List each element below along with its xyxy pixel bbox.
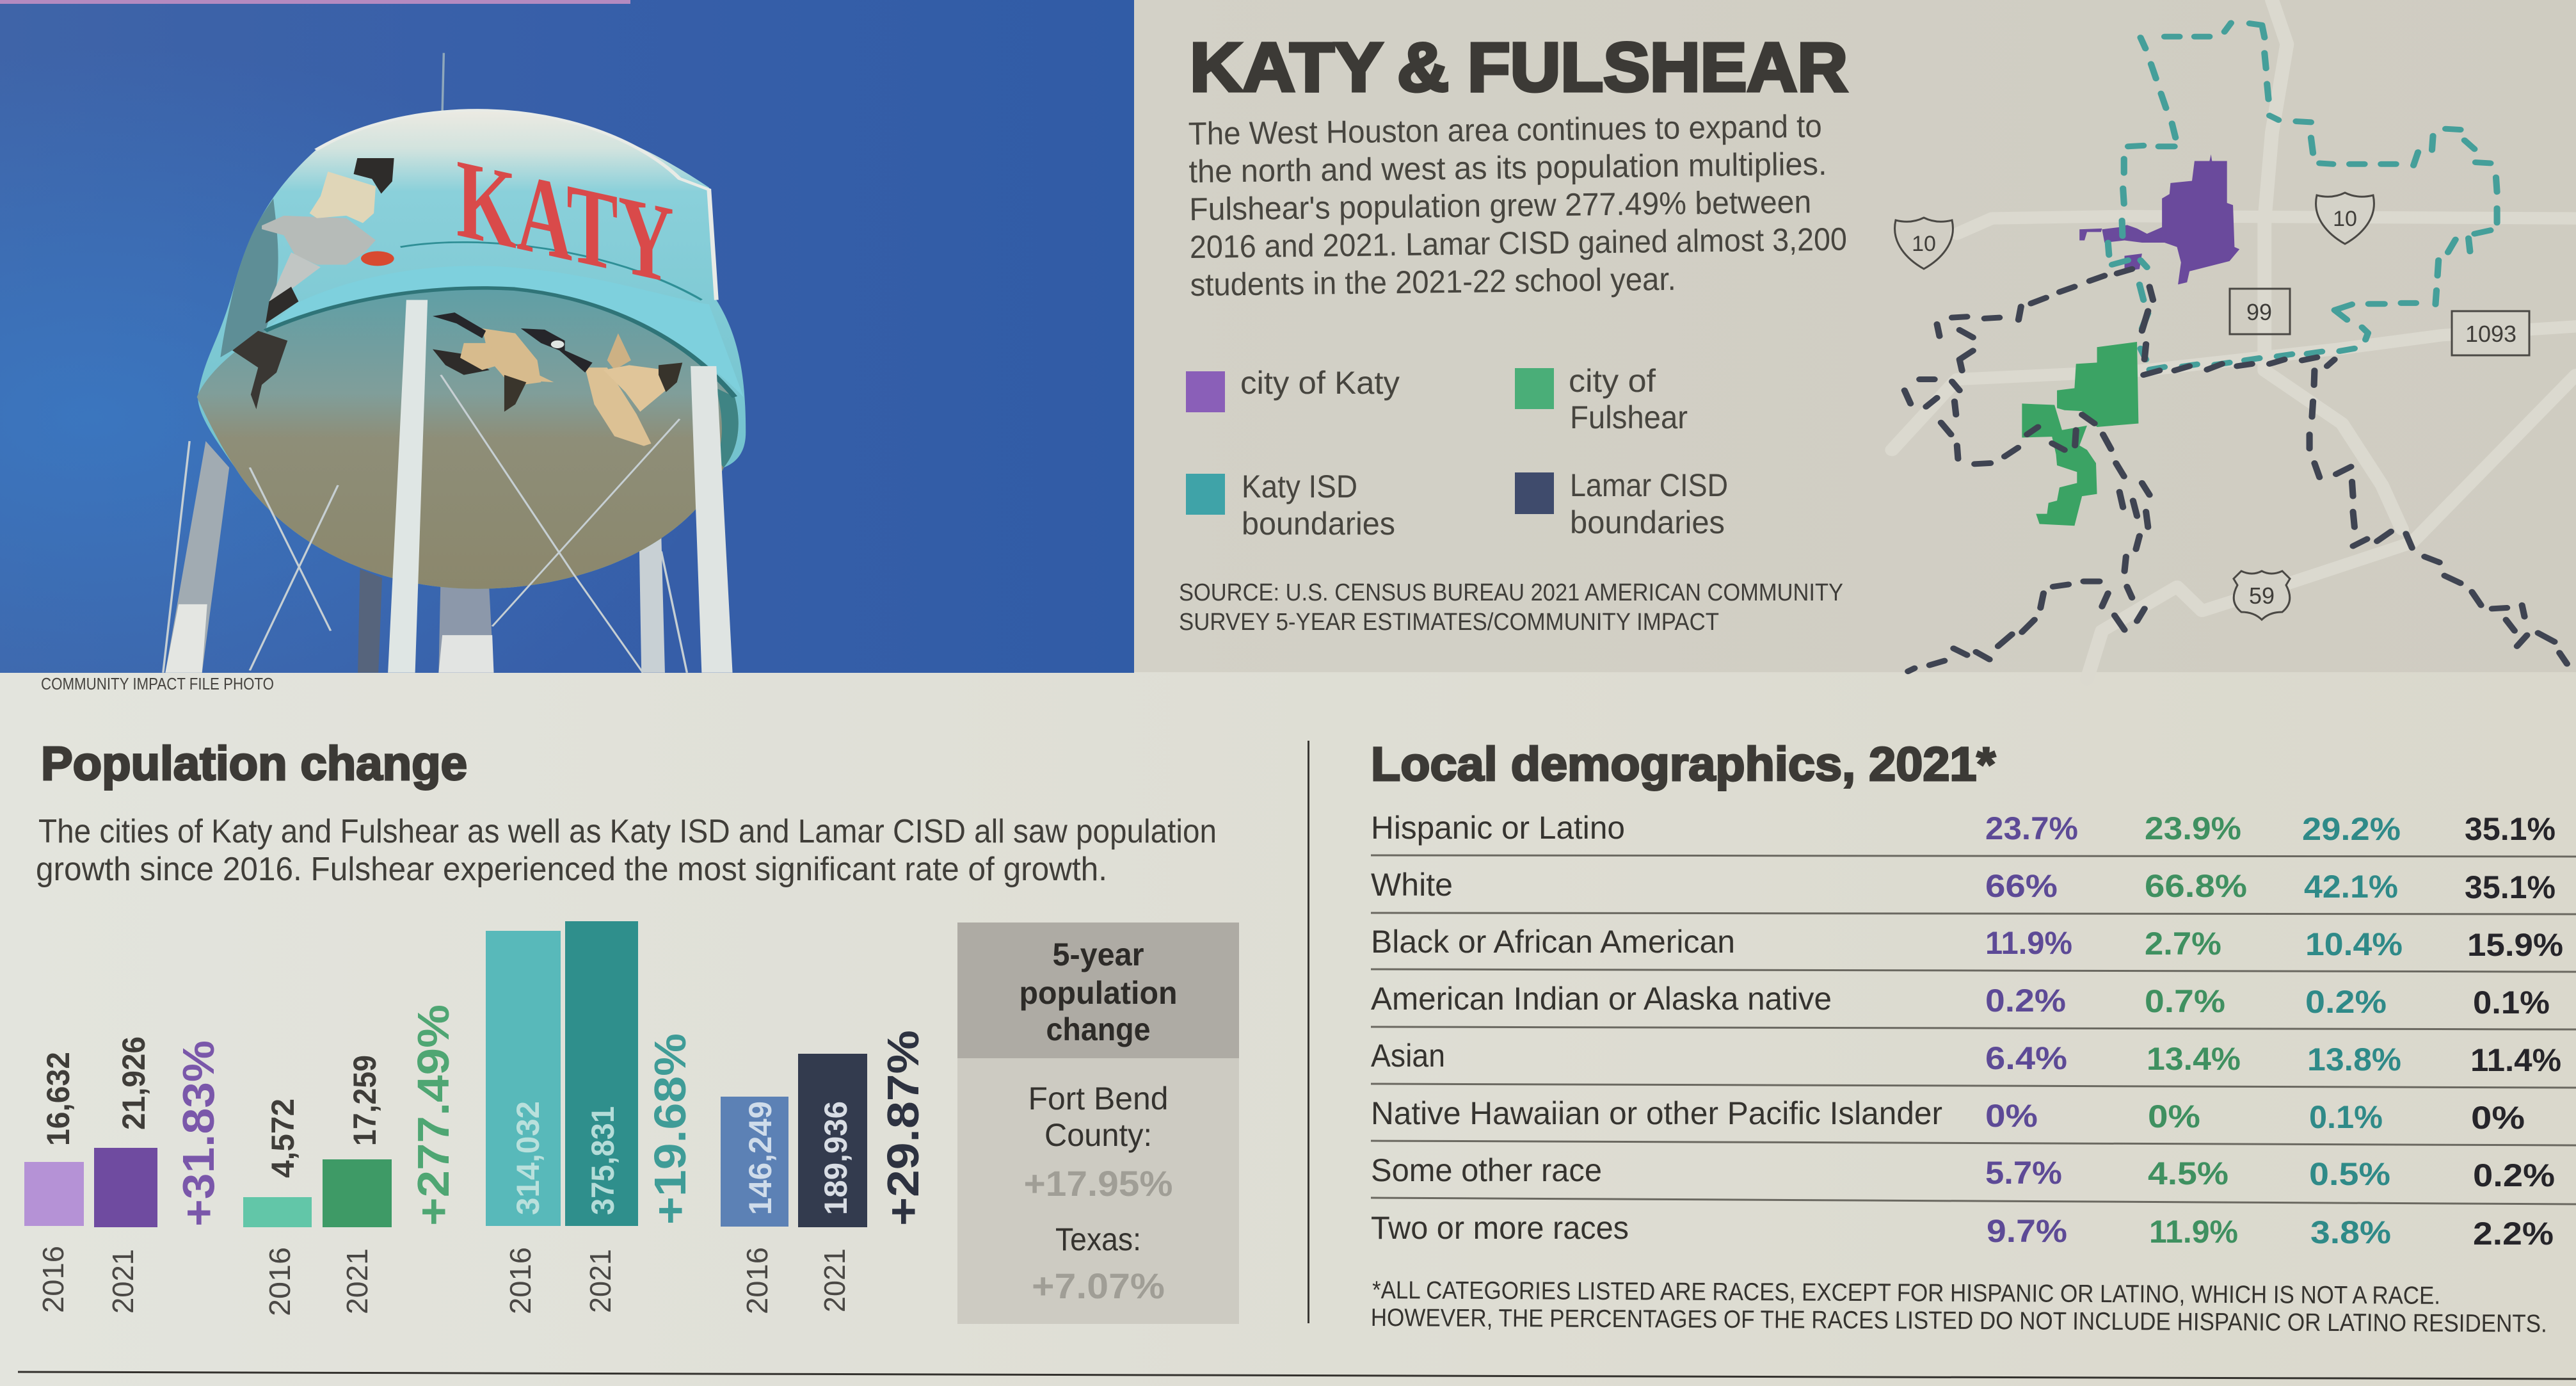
row: Two or more races: Two or more races [1371, 1210, 1629, 1246]
row: American Indian or Alaska native: 0.1% [2473, 985, 2550, 1020]
row: White: 66% [1985, 868, 2058, 904]
description: The cities of Katy and Fulshear as well as Katy ISD and Lamar CISD all saw population [38, 813, 1217, 850]
row: Native Hawaiian or other Pacific Islander: 0% [1985, 1098, 2038, 1134]
row: Hispanic or Latino: 35.1% [2465, 811, 2556, 847]
footnote: *ALL CATEGORIES LISTED ARE RACES, EXCEPT FOR HISPANIC OR LATINO, WHICH IS NOT A RACE. [1372, 1277, 2440, 1310]
row: American Indian or Alaska native: American Indian or Alaska native [1371, 981, 1832, 1017]
row: Asian: 13.4% [2147, 1041, 2241, 1077]
bar chart: Katy ISD: 314,032 [510, 1101, 546, 1215]
FM 1093 marker: 1093 [2465, 321, 2516, 347]
bar chart: city of Katy: +31.83% [173, 1040, 223, 1227]
intro text: Fulshear's population grew 277.49% between [1189, 184, 1812, 227]
row: Asian: 13.8% [2307, 1042, 2401, 1077]
intro text: the north and west as its population multiplies. [1188, 146, 1827, 189]
row: American Indian or Alaska native: 0.2% [1985, 983, 2066, 1019]
row: American Indian or Alaska native: 0.7% [2145, 983, 2225, 1019]
intro text [1188, 108, 1848, 303]
row: Hispanic or Latino [1371, 810, 2556, 847]
bar chart: Katy ISD: 2021 [584, 1249, 617, 1313]
bar chart: Lamar CISD: 146,249 [742, 1101, 778, 1215]
bar chart: city of Katy [24, 1036, 223, 1314]
US 59 shield [2234, 571, 2290, 620]
bar chart: city of Fulshear: 4,572 [265, 1099, 301, 1178]
bar chart: Lamar CISD [721, 1030, 928, 1314]
panel: intro and map [1134, 0, 2576, 679]
callout: 5-year population change: County: [1044, 1117, 1152, 1153]
bar chart: Lamar CISD: 189,936 [818, 1101, 854, 1215]
row: Hispanic or Latino: 29.2% [2302, 811, 2401, 847]
legend: city of Fulshear [1515, 363, 1688, 435]
intro text: The West Houston area continues to expand to [1188, 108, 1822, 152]
row: Two or more races: 2.2% [2473, 1216, 2554, 1252]
row: Some other race: 0.2% [2473, 1157, 2555, 1193]
row: White [1371, 867, 2556, 905]
row: Asian: Asian [1371, 1038, 1445, 1074]
bar chart: Katy ISD [486, 921, 695, 1314]
city of Fulshear area [2022, 342, 2138, 526]
tower structure [163, 53, 746, 673]
row: Asian [1371, 1038, 2561, 1078]
row: Native Hawaiian or other Pacific Islander: 0.1% [2309, 1099, 2383, 1135]
bar chart: city of Katy: 21,926 [116, 1036, 152, 1130]
map roads [1892, 0, 2576, 679]
row: Black or African American: Black or African American [1371, 924, 1735, 960]
description [36, 813, 1217, 888]
bar chart: Lamar CISD: +29.87% [878, 1030, 928, 1226]
row: Some other race: Some other race [1371, 1152, 1602, 1188]
bar chart: Lamar CISD: 2021 [818, 1248, 851, 1312]
Lamar CISD boundary [1905, 269, 2567, 672]
FM 1093 marker [2452, 311, 2529, 355]
legend: city of Fulshear: Fulshear [1570, 399, 1688, 435]
panel: population change [24, 737, 1239, 1324]
Highway 99 marker: 99 [2246, 299, 2272, 325]
bar chart: Katy ISD: +19.68% [645, 1033, 695, 1225]
Highway 99 marker [2230, 289, 2290, 334]
bar chart: city of Fulshear: 2021 [340, 1248, 374, 1314]
callout: 5-year population change [957, 923, 1239, 1324]
title [1190, 28, 1848, 106]
legend: Lamar CISD boundaries: Lamar CISD [1570, 467, 1728, 503]
row: Some other race: 5.7% [1985, 1155, 2062, 1191]
row: White: 42.1% [2304, 869, 2398, 905]
heading: Population change [41, 737, 467, 790]
legend: city of Fulshear: city of [1569, 363, 1656, 399]
bar chart: city of Fulshear [243, 1004, 458, 1316]
I-10 shield west [1895, 218, 1953, 269]
row: Hispanic or Latino: Hispanic or Latino [1371, 810, 1625, 846]
I-10 shield east: 10 [2333, 207, 2357, 231]
title: KATY [1190, 28, 1383, 106]
callout: 5-year population change: 5-year [1052, 937, 1144, 972]
bar chart: city of Katy: 2021 [106, 1249, 140, 1314]
source note [1179, 579, 1843, 636]
row: Two or more races: 9.7% [1987, 1213, 2067, 1249]
row: Native Hawaiian or other Pacific Islander: 0% [2471, 1100, 2525, 1136]
Katy ISD boundary [2108, 23, 2497, 369]
source note: SOURCE: U.S. CENSUS BUREAU 2021 AMERICAN COMMUNITY [1179, 579, 1843, 606]
row: Some other race: 4.5% [2148, 1156, 2228, 1191]
legend: Katy ISD boundaries [1186, 469, 1395, 542]
row: Native Hawaiian or other Pacific Islander: Native Hawaiian or other Pacific Islander [1371, 1095, 1942, 1131]
callout: 5-year population change: +17.95% [1024, 1163, 1172, 1204]
row: Black or African American: 11.9% [1985, 925, 2072, 961]
row: American Indian or Alaska native [1371, 981, 2550, 1020]
row: Black or African American [1371, 924, 2563, 963]
row: Some other race: 0.5% [2309, 1156, 2390, 1192]
tower lettering: KATY [456, 135, 674, 307]
row: American Indian or Alaska native: 0.2% [2305, 984, 2387, 1020]
legend: Katy ISD boundaries: boundaries [1242, 506, 1395, 542]
bar chart: Katy ISD: 2016 [504, 1247, 537, 1314]
row: Native Hawaiian or other Pacific Islander: 0% [2148, 1099, 2200, 1134]
bar chart: Katy ISD: 375,831 [585, 1106, 621, 1215]
map [1892, 0, 2576, 679]
geese mural [232, 158, 682, 446]
source note: SURVEY 5-YEAR ESTIMATES/COMMUNITY IMPACT [1179, 609, 1719, 636]
I-10 shield east [2316, 193, 2374, 244]
photo credit: COMMUNITY IMPACT FILE PHOTO [41, 674, 274, 693]
row: Black or African American: 2.7% [2145, 926, 2221, 962]
heading: Local demographics, 2021* [1371, 737, 1996, 791]
photo: Katy water tower [0, 0, 1134, 673]
row: White: 66.8% [2145, 868, 2247, 904]
bar chart: city of Fulshear: 17,259 [347, 1055, 383, 1146]
US 59 shield: 59 [2249, 583, 2275, 609]
footnote [1371, 1277, 2547, 1338]
row: Two or more races: 3.8% [2310, 1214, 2391, 1250]
callout: 5-year population change: Fort Bend [1028, 1081, 1169, 1116]
row: Two or more races [1371, 1210, 2554, 1252]
title: & [1397, 28, 1449, 106]
intro text: 2016 and 2021. Lamar CISD gained almost 3,200 [1190, 221, 1847, 265]
row: Two or more races: 11.9% [2149, 1214, 2238, 1250]
bar chart: city of Fulshear: 2016 [263, 1247, 296, 1316]
city of Katy area [2079, 154, 2239, 284]
description: growth since 2016. Fulshear experienced the most significant rate of growth. [36, 851, 1107, 888]
intro text: students in the 2021-22 school year. [1190, 261, 1676, 303]
row: White: 35.1% [2465, 869, 2556, 905]
legend: Lamar CISD boundaries: boundaries [1570, 504, 1725, 540]
panel: local demographics [1371, 737, 2576, 1338]
callout: 5-year population change: change [1046, 1011, 1151, 1047]
legend: Lamar CISD boundaries [1515, 467, 1728, 540]
legend: city of Katy: city of Katy [1240, 365, 1400, 401]
row: Hispanic or Latino: 23.7% [1985, 810, 2078, 846]
row: Some other race [1371, 1152, 2555, 1193]
bar chart: Lamar CISD: 2016 [740, 1247, 774, 1314]
bar chart: city of Katy: 16,632 [40, 1052, 76, 1146]
bar chart: city of Fulshear: +277.49% [408, 1004, 458, 1226]
legend [1186, 363, 1728, 542]
row: Native Hawaiian or other Pacific Islander [1371, 1095, 2525, 1136]
row: Hispanic or Latino: 23.9% [2145, 810, 2241, 846]
row: Black or African American: 15.9% [2467, 927, 2563, 963]
bar chart: city of Katy: 2016 [36, 1246, 70, 1313]
I-10 shield west: 10 [1912, 232, 1936, 256]
legend: city of Katy [1186, 365, 1400, 412]
row: Asian: 6.4% [1985, 1040, 2067, 1076]
legend: Katy ISD boundaries: Katy ISD [1242, 469, 1357, 504]
callout: 5-year population change: Texas: [1055, 1221, 1141, 1257]
callout: 5-year population change: +7.07% [1032, 1266, 1165, 1306]
row: Asian: 11.4% [2470, 1042, 2561, 1078]
callout: 5-year population change: population [1019, 975, 1178, 1011]
title: FULSHEAR [1468, 28, 1848, 106]
row: Black or African American: 10.4% [2305, 926, 2403, 962]
row: White: White [1371, 867, 1453, 903]
